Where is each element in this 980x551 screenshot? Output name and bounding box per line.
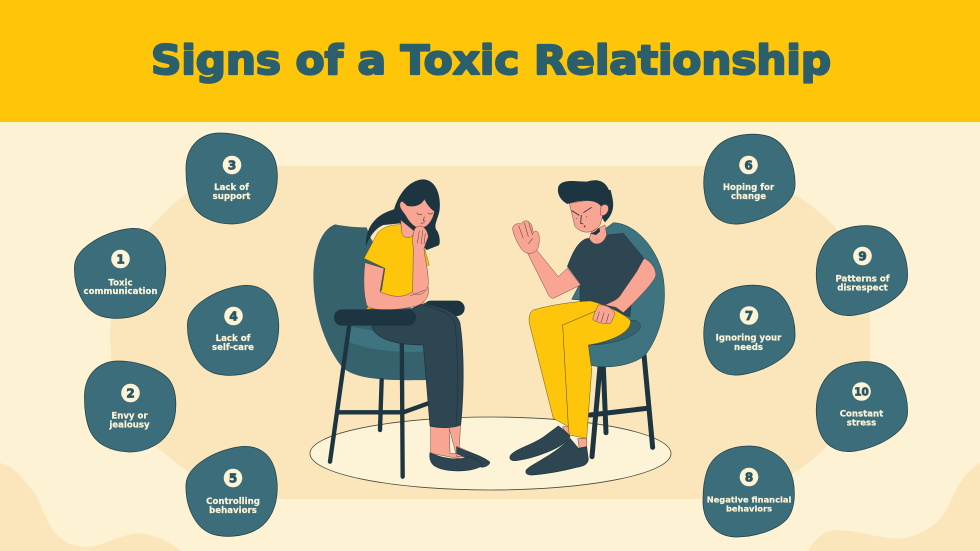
card 3: lack of support (186, 133, 277, 224)
number badge 3: 3 (228, 158, 236, 172)
label: behaviors (726, 504, 772, 514)
number badge 4: 4 (229, 309, 238, 323)
right armrest (423, 301, 465, 316)
number badge 9: 9 (858, 249, 867, 263)
label: behaviors (209, 506, 257, 516)
number badge 1: 1 (116, 252, 125, 266)
number badge 6: 6 (744, 158, 753, 172)
chair (572, 223, 665, 367)
card 5: controlling behaviors (186, 446, 277, 536)
label: support (213, 192, 250, 202)
chair seat shadow (588, 320, 640, 345)
face (400, 198, 435, 228)
card 9: patterns of disrespect (816, 226, 908, 316)
label: Lack of (214, 183, 249, 193)
back hair (366, 179, 440, 250)
fringe (400, 183, 439, 212)
raised arm (527, 249, 581, 298)
resting arm and hand (605, 258, 656, 313)
label: Envy or (111, 412, 148, 422)
decorative wave bottom right (808, 463, 980, 551)
label: self-care (212, 343, 254, 353)
chair back (313, 224, 427, 380)
stool seat bar (334, 309, 416, 326)
label: Lack of (216, 334, 251, 344)
label: Controlling (206, 497, 260, 507)
title: Signs of a Toxic Relationship (151, 38, 831, 84)
card 2: envy or jealousy (84, 361, 176, 452)
raised hand (513, 221, 539, 253)
label: stress (847, 418, 876, 428)
label: jealousy (108, 420, 150, 430)
central backdrop shape (110, 166, 870, 499)
number badge 8: 8 (745, 470, 753, 484)
trousers (529, 301, 631, 438)
card 7: ignoring your needs (704, 285, 795, 375)
floor ellipse (310, 417, 671, 490)
hair back (590, 190, 613, 222)
decorative wave bottom left (0, 463, 182, 551)
shoes (510, 426, 570, 461)
ear and brows (601, 205, 608, 216)
card 6: hoping for change (704, 134, 795, 224)
hair (558, 180, 610, 207)
shirt (364, 225, 429, 309)
shoes (457, 447, 490, 467)
number badge 2: 2 (126, 386, 135, 400)
ankles (563, 427, 587, 450)
header band (0, 0, 980, 122)
label: Patterns of (835, 274, 890, 284)
card 1: toxic communication (74, 228, 166, 318)
stool legs (330, 320, 428, 477)
number badge 5: 5 (229, 471, 237, 485)
stool legs (590, 355, 653, 457)
label: needs (734, 343, 763, 353)
label: Ignoring your (716, 334, 782, 344)
chair seat (348, 327, 423, 352)
card 10: constant stress (816, 362, 908, 452)
label: Hoping for (723, 183, 775, 193)
facial features (417, 213, 433, 223)
label: disrespect (837, 284, 888, 294)
trousers (372, 303, 463, 428)
number badge 7: 7 (745, 309, 753, 323)
shirt (567, 233, 644, 317)
card 4: lack of self-care (187, 285, 279, 375)
man on chair (510, 180, 665, 475)
feet (431, 425, 475, 460)
woman on chair (313, 179, 490, 477)
card 8: negative financial behaviors (703, 446, 794, 537)
neck (589, 225, 607, 244)
label: Toxic (108, 278, 133, 288)
head (569, 198, 604, 232)
label: communication (83, 287, 158, 297)
label: Negative financial (707, 494, 791, 504)
label: change (731, 192, 766, 202)
neck (401, 220, 415, 238)
label: Constant (840, 410, 883, 420)
arm and hand (364, 263, 429, 310)
number badge 10: 10 (854, 386, 869, 398)
